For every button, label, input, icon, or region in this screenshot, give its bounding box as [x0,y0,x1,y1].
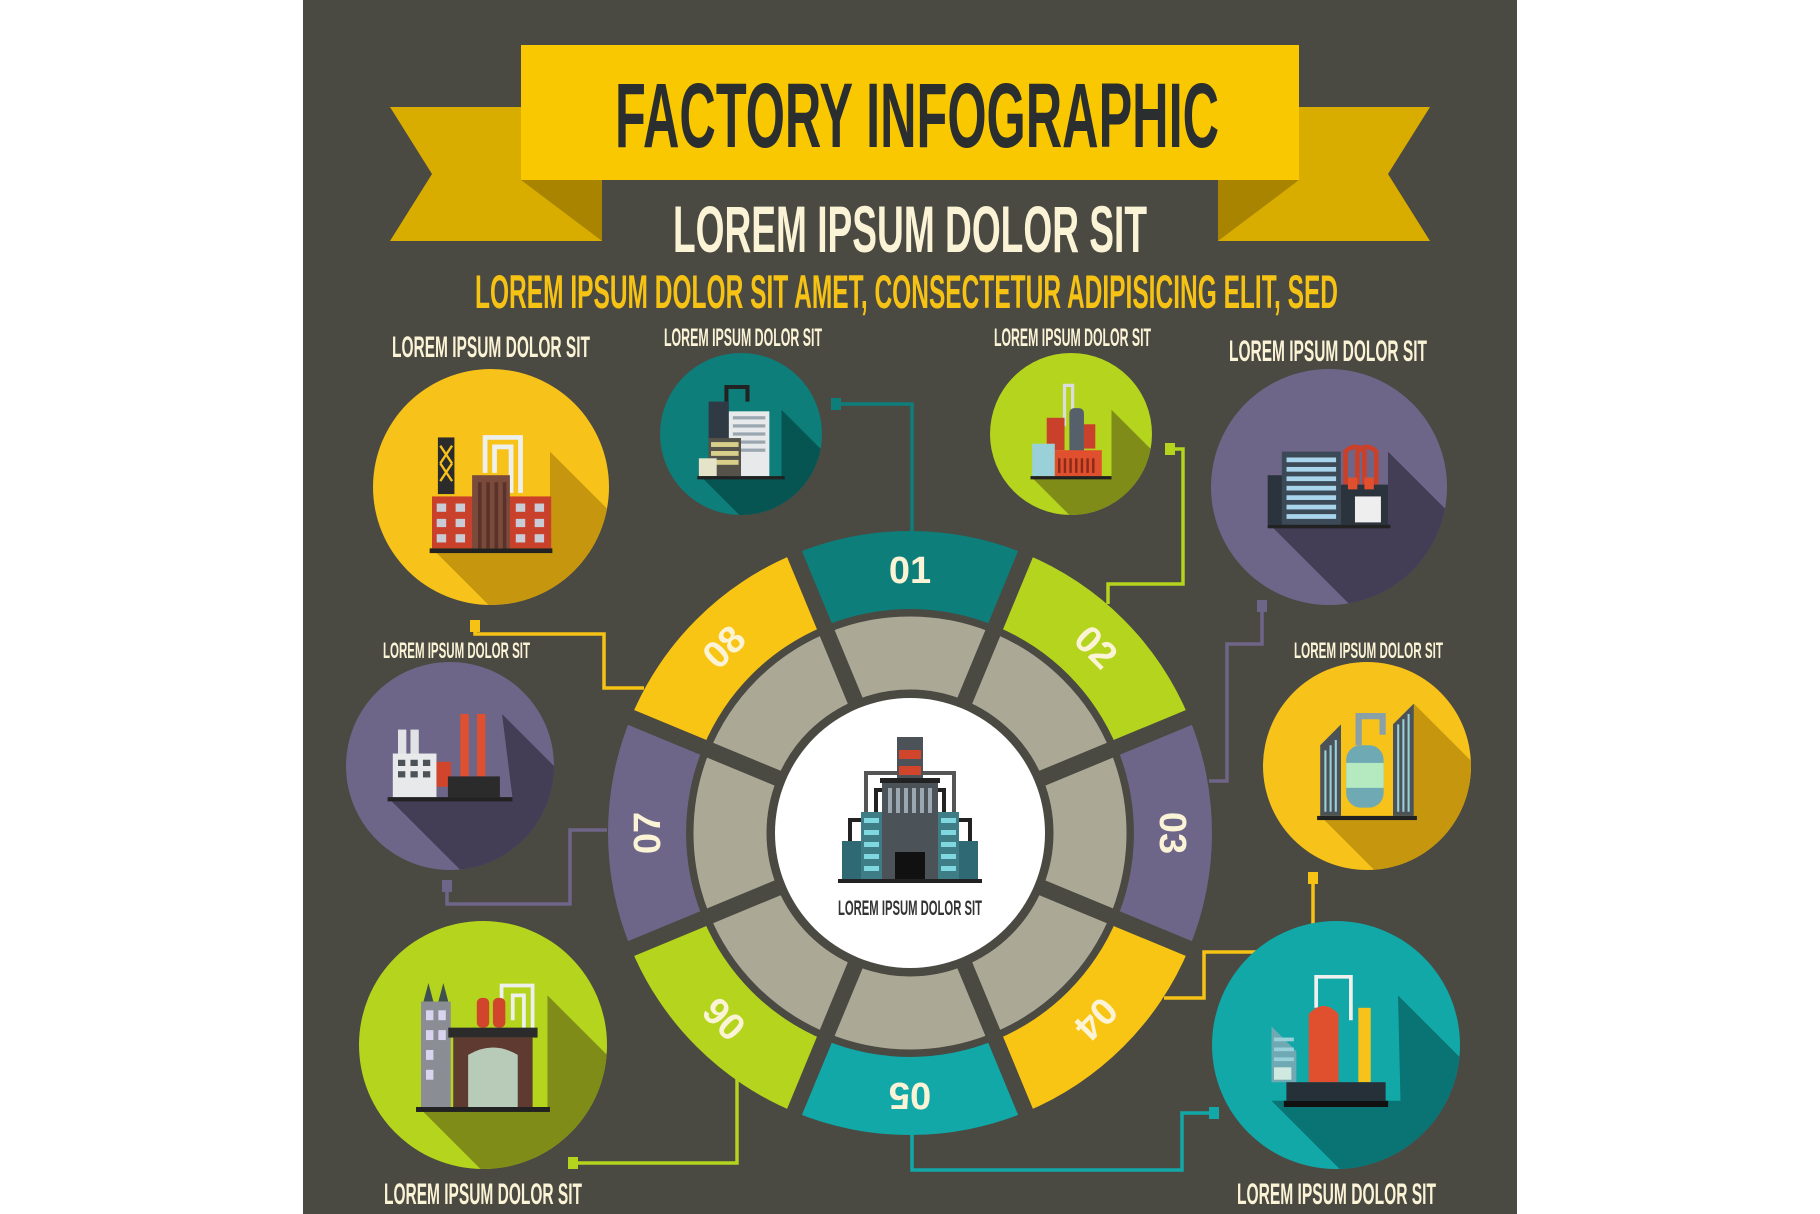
circle 8: teal bottom-right [1212,921,1460,1169]
center icon: factory [838,737,982,883]
label 1: LOREM IPSUM DOLOR SIT [392,331,590,364]
circle 2: teal small [660,353,822,515]
circle 1: yellow top-left [373,369,609,605]
label 5: LOREM IPSUM DOLOR SIT [383,638,530,663]
text: LOREM IPSUM DOLOR SIT [994,324,1151,352]
outer colored segments [608,531,1212,1135]
segment numbers: 06 [695,988,755,1048]
label 4: LOREM IPSUM DOLOR SIT [1229,335,1427,368]
title text: FACTORY INFOGRAPHIC [615,65,1219,167]
connector lines [447,404,1313,1170]
circle 5: purple left [346,662,554,870]
circle 3: lime small [990,353,1152,515]
segment numbers: 08 [695,618,755,678]
center label: LOREM IPSUM DOLOR SIT [838,897,982,920]
subtitle: LOREM IPSUM DOLOR SIT [673,192,1147,266]
label 8: LOREM IPSUM DOLOR SIT [1237,1178,1436,1211]
segment numbers: 01 [889,550,931,592]
segment numbers [627,550,1193,1116]
segment numbers: 04 [1065,988,1125,1048]
label 6: LOREM IPSUM DOLOR SIT [1294,638,1443,663]
segment numbers: 07 [627,812,669,854]
segment numbers: 02 [1065,618,1125,678]
text: LOREM IPSUM DOLOR SIT [664,324,822,352]
title banner [390,45,1430,241]
circle 4: purple top-right [1211,369,1447,605]
segment numbers: 03 [1151,812,1193,854]
segment numbers: 05 [889,1074,931,1116]
circle 7: lime bottom-left [359,921,607,1169]
label 7: LOREM IPSUM DOLOR SIT [384,1178,582,1211]
wheel [608,531,1212,1135]
circle 6: yellow right [1263,662,1471,870]
background panel [303,0,1517,1214]
